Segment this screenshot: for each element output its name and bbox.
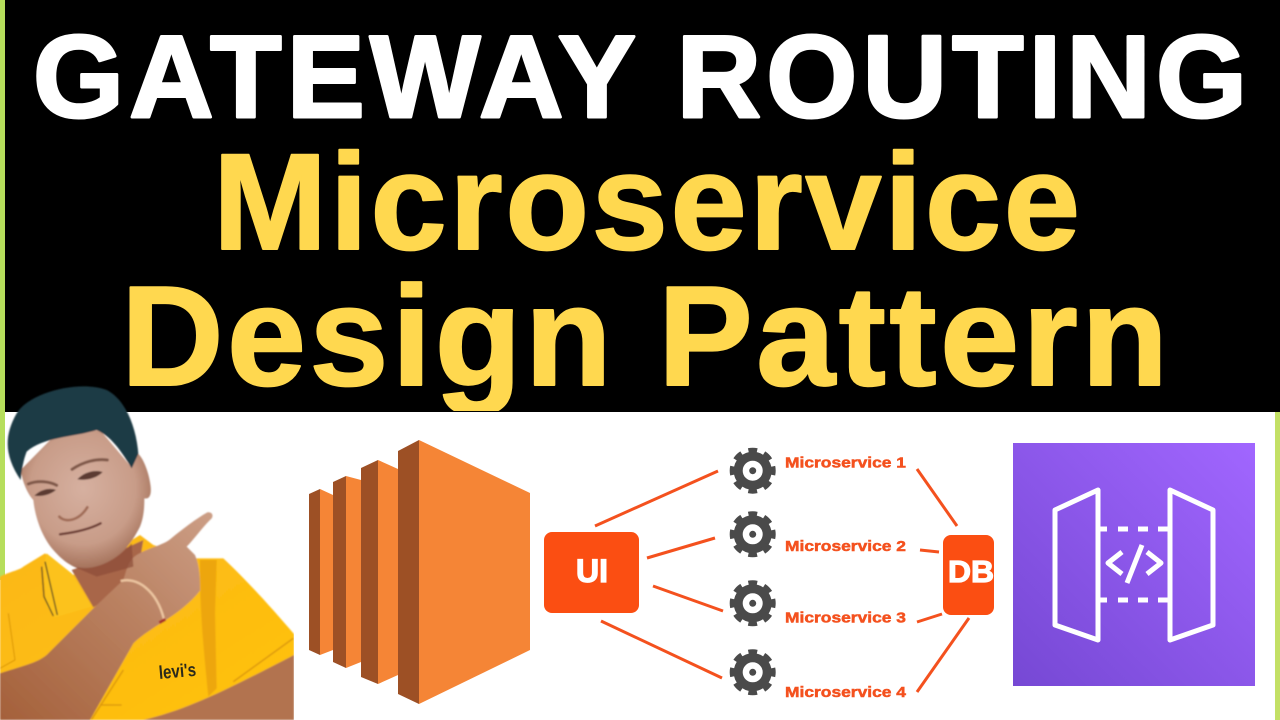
shirt: [0, 535, 294, 720]
microservice labels: Microservice 4: [785, 684, 907, 701]
connector lines: [595, 469, 969, 692]
microservice labels: [785, 454, 907, 701]
neck: [72, 540, 143, 607]
icon: aws api gateway: [1013, 443, 1255, 686]
presenter pointing: [0, 386, 294, 720]
pointing arm and hand: [0, 512, 213, 720]
lower arm: [143, 655, 294, 720]
ui box: UI: [576, 553, 608, 589]
title: gateway routing: GATEWAY ROUTING: [33, 11, 1247, 142]
icon: aws compute servers: [309, 440, 530, 704]
microservice labels: Microservice 3: [785, 610, 906, 626]
microservice labels: Microservice 2: [785, 538, 906, 555]
microservice labels: Microservice 1: [785, 454, 906, 472]
ui box: [544, 532, 639, 613]
header band: [5, 0, 1280, 412]
shirt logo: levi's: [158, 659, 197, 683]
db box: [943, 535, 994, 615]
face: [21, 430, 151, 569]
hair: [8, 386, 138, 480]
microservice diagram: [544, 451, 994, 701]
gear icons: [733, 451, 772, 692]
db box: DB: [948, 554, 994, 589]
title: microservice: Microservice: [213, 126, 1080, 279]
title: design pattern: Design Pattern: [121, 257, 1168, 416]
